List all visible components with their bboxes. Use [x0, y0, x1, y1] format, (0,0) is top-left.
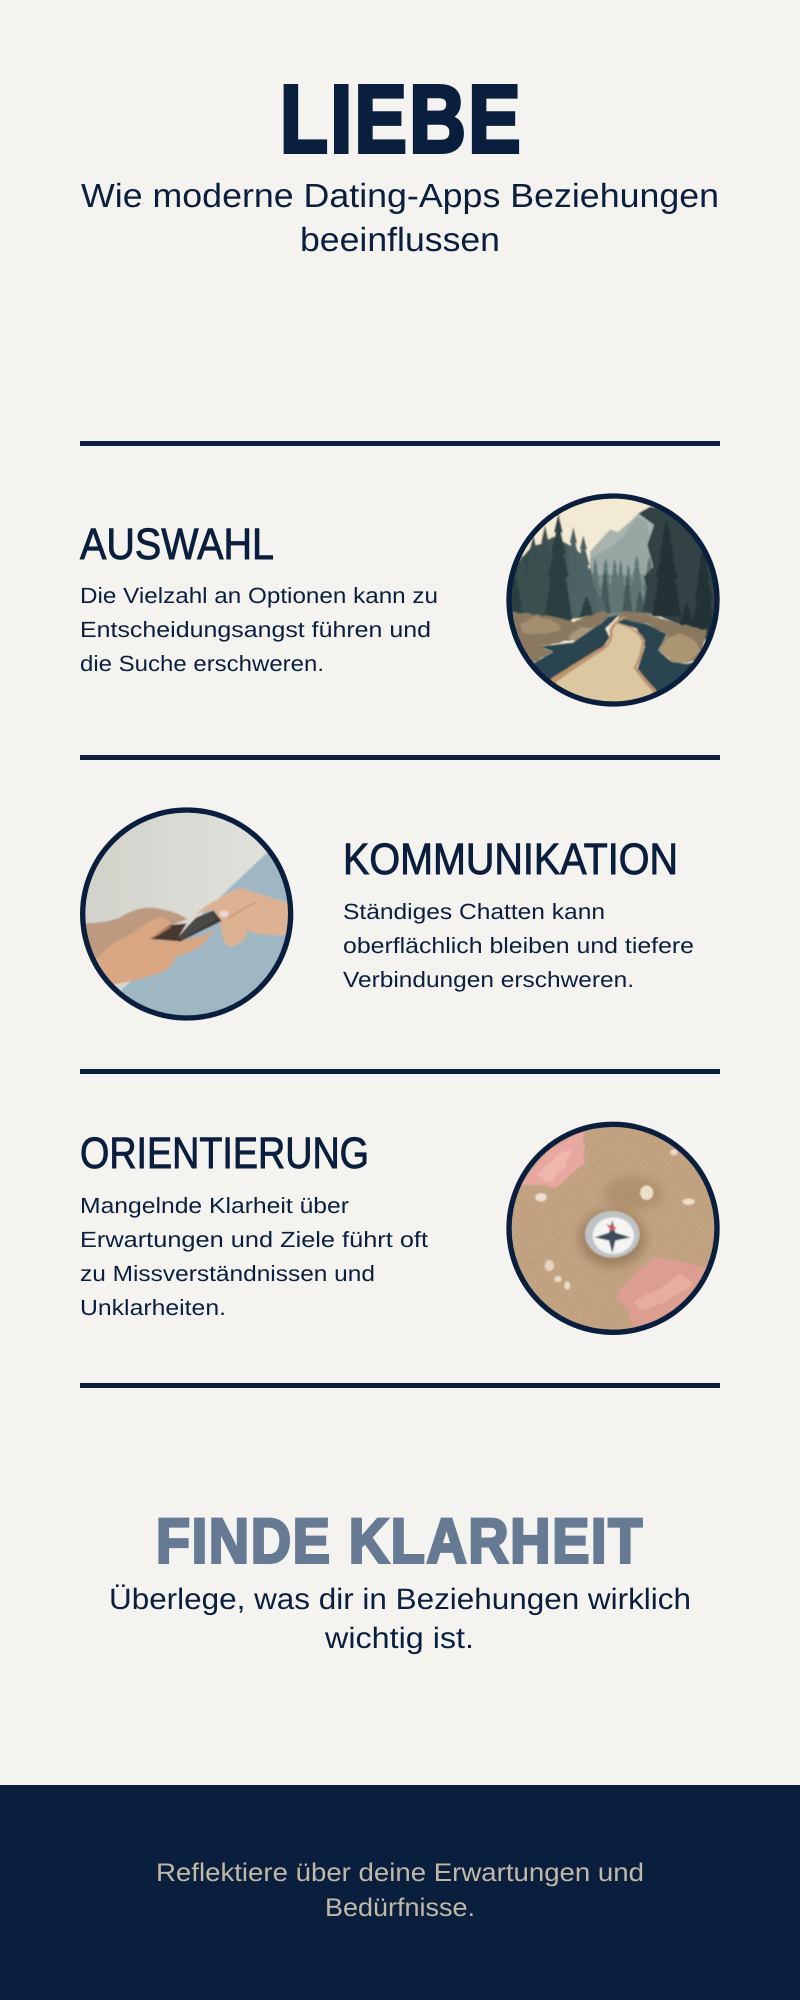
text block: Auswahl: die Suche erschweren.: [80, 651, 324, 676]
footer text: Bedürfnisse.: [325, 1894, 475, 1922]
header: [81, 66, 719, 259]
callout text: Überlege, was dir in Beziehungen wirklich: [109, 1583, 691, 1616]
text block: Auswahl: Entscheidungsangst führen und: [80, 617, 431, 642]
text block: Orientierung: [80, 1193, 428, 1320]
text block: Kommunikation: Ständiges Chatten kann: [343, 899, 605, 924]
subtitle: beeinflussen: [300, 222, 500, 259]
text block: Auswahl: [80, 583, 438, 676]
subtitle: [81, 178, 719, 259]
text block: Kommunikation: Verbindungen erschweren.: [343, 967, 634, 992]
footer text: [156, 1859, 644, 1922]
text block: Orientierung: Erwartungen und Ziele führt oft: [80, 1227, 428, 1252]
heading: Kommunikation: KOMMUNIKATION: [343, 835, 678, 884]
footer text: Reflektiere über deine Erwartungen und: [156, 1859, 644, 1887]
subtitle: Wie moderne Dating-Apps Beziehungen: [81, 178, 719, 215]
image: hands passing a phone: [80, 807, 294, 1021]
heading: Auswahl: AUSWAHL: [80, 520, 274, 569]
text block: Kommunikation: oberflächlich bleiben und tiefere: [343, 933, 694, 958]
panel: Auswahl: [80, 490, 723, 713]
heading: Orientierung: ORIENTIERUNG: [80, 1129, 369, 1178]
callout heading: FINDE KLARHEIT: [156, 1506, 644, 1576]
footer: [0, 1785, 800, 2000]
text block: Orientierung: Unklarheiten.: [80, 1295, 226, 1320]
text block: Kommunikation: [343, 899, 694, 992]
panel: Kommunikation: [77, 802, 694, 1028]
callout text: [109, 1583, 691, 1655]
callout text: wichtig ist.: [324, 1622, 474, 1655]
panel: Orientierung: [80, 1117, 723, 1343]
text block: Orientierung: Mangelnde Klarheit über: [80, 1193, 349, 1218]
image: forest path: [502, 490, 723, 713]
image: compass in sand: [503, 1117, 723, 1343]
text block: Auswahl: Die Vielzahl an Optionen kann zu: [80, 583, 438, 608]
title: LIEBE: [280, 66, 523, 173]
text block: Orientierung: zu Missverständnissen und: [80, 1261, 375, 1286]
callout: Finde Klarheit: [109, 1506, 691, 1655]
